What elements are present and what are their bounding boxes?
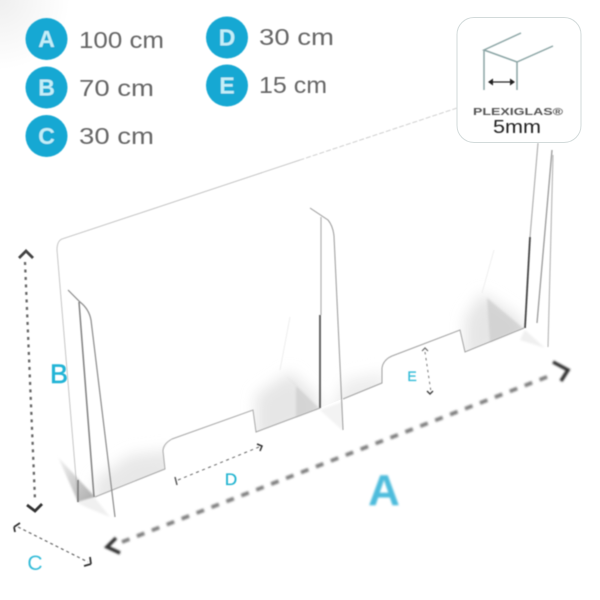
legend item E: 15 cm — [206, 64, 327, 106]
dimension label E: E — [407, 368, 417, 384]
legend item E: 15 cm: 15 cm — [259, 72, 327, 98]
legend item C: 30 cm — [26, 115, 154, 157]
icon: plexiglass thickness — [484, 33, 553, 90]
dimension arrow C — [14, 523, 91, 566]
thickness value: 5mm — [493, 117, 541, 137]
left foot — [68, 290, 115, 517]
legend item A: 100 cm — [26, 18, 164, 60]
dimension arrow D — [175, 444, 262, 485]
legend item A: 100 cm: A — [38, 26, 55, 52]
panel shading — [95, 293, 525, 510]
panel outline with cutouts — [57, 108, 524, 502]
legend — [26, 16, 334, 157]
dimension arrow E — [422, 348, 433, 394]
dimension label C: C — [27, 552, 43, 575]
plexiglass barrier illustration — [57, 108, 553, 517]
legend item A: 100 cm: 100 cm — [79, 27, 164, 53]
dimension label B: B — [50, 359, 68, 389]
dimension arrow A — [107, 362, 568, 553]
legend item B: 70 cm: B — [38, 74, 55, 100]
dimension arrow B — [19, 251, 42, 511]
legend item B: 70 cm: 70 cm — [79, 75, 154, 101]
legend item D: 30 cm: 30 cm — [259, 24, 334, 50]
material label: PLEXIGLAS® — [473, 106, 563, 118]
dimension label A: A — [368, 466, 400, 515]
thickness callout box — [457, 18, 581, 142]
legend item B: 70 cm — [26, 66, 154, 108]
right foot — [482, 143, 553, 347]
legend item C: 30 cm: C — [38, 123, 55, 149]
legend item E: 15 cm: E — [219, 72, 235, 98]
legend item C: 30 cm: 30 cm — [79, 123, 154, 149]
legend item D: 30 cm: D — [219, 24, 235, 50]
middle foot — [280, 208, 343, 430]
dimension label D: D — [225, 470, 237, 489]
legend item D: 30 cm — [206, 16, 334, 58]
